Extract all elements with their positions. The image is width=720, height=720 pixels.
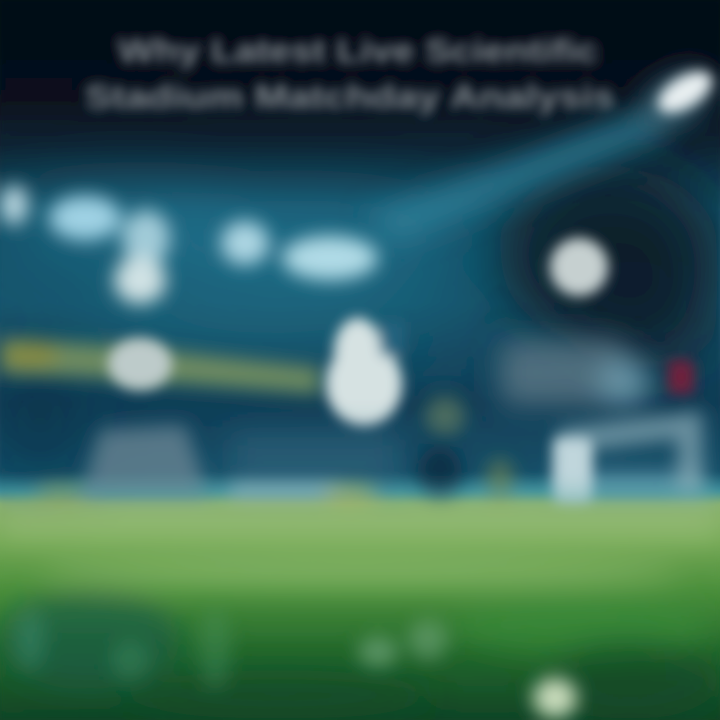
title text: Stadium Matchday Analysis: [85, 78, 615, 115]
pitch: grass highlights: [0, 508, 720, 720]
left band marker: [108, 338, 172, 390]
goal: lower right: [555, 425, 705, 500]
floodlight: upper right: [631, 61, 719, 139]
title text: [85, 32, 615, 115]
central dim structure: [230, 430, 400, 490]
round marker: upper right circle: [550, 238, 608, 296]
title text: Why Latest Live Scientific: [118, 32, 598, 69]
dark right side of the stadium: [0, 165, 720, 480]
goal post highlight: [554, 438, 592, 502]
dark figure: [418, 446, 462, 498]
left grey structure: [80, 425, 210, 500]
small olive circle: [425, 396, 465, 436]
yellow-green horizontal band: [0, 338, 320, 394]
spotlight beam: upper right: [365, 110, 670, 245]
large center number shape: [326, 318, 404, 426]
grass blades and blurred flowers: [14, 610, 577, 718]
right grey block: [500, 340, 651, 406]
light band: left stadium lights: [0, 185, 378, 304]
red marker: [668, 360, 694, 394]
horizon glow strip: [0, 458, 720, 503]
